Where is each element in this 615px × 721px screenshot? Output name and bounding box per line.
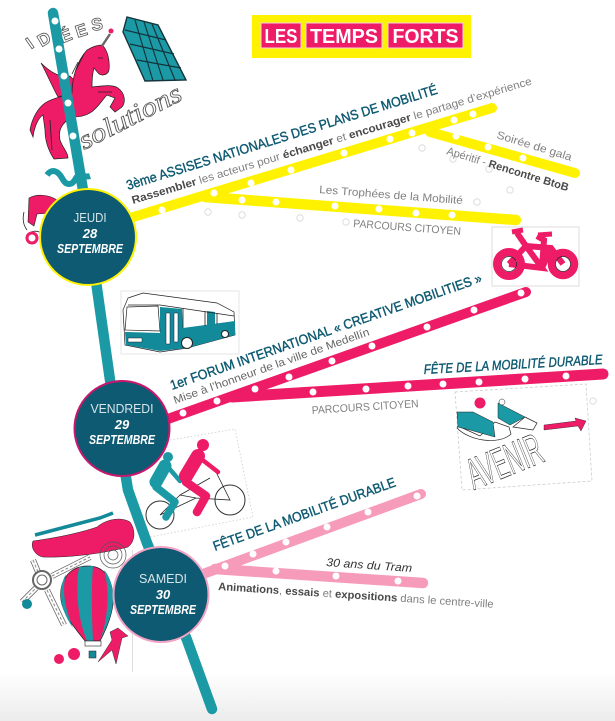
icon: words IDEES: E — [73, 20, 90, 42]
icon: pink scooter — [23, 195, 57, 243]
icon: hot air balloon — [61, 566, 113, 658]
icon: words IDEES: D — [34, 28, 54, 51]
icon: words IDEES: I — [22, 34, 37, 53]
text: rassembler: Rassembler les acteurs pour échanger et encourager le partage d’expérience — [130, 76, 533, 207]
icon: solar panel — [123, 17, 186, 81]
text: soiree de gala: Soirée de gala — [495, 129, 574, 164]
day badge: vendredi: 29 — [114, 417, 130, 432]
icon: pink bicycle — [492, 227, 579, 286]
icon: sneaker one — [457, 412, 511, 441]
icon: words IDEES: S — [90, 14, 104, 35]
day badge: jeudi: 28 — [82, 226, 98, 241]
text: animations: Animations, essais et expositions dans le centre-ville — [218, 581, 494, 611]
icon: paddle — [35, 513, 113, 535]
text: 30 ans du tram: 30 ans du Tram — [326, 557, 413, 575]
rider: pink — [186, 439, 218, 512]
icon: teal squiggle — [47, 171, 90, 184]
day badge: vendredi: SEPTEMBRE — [89, 432, 155, 447]
icon: sneakers, arrow and AVENIR — [455, 384, 592, 499]
icon: roundabout roads — [22, 557, 90, 625]
day badge: samedi: SEPTEMBRE — [130, 602, 196, 617]
day badge: samedi: SAMEDI — [139, 572, 187, 586]
icon: flowers — [54, 648, 80, 664]
icon: pink tower arrow — [98, 628, 128, 664]
icon: teal dot — [22, 599, 32, 609]
icon: flower — [474, 398, 486, 408]
text: parcours citoyen jeudi: PARCOURS CITOYEN — [353, 218, 461, 238]
icon: tandem bicycle — [146, 429, 253, 537]
text: trophees: Les Trophées de la Mobilité — [319, 184, 463, 207]
day badge: jeudi: JEUDI — [74, 211, 106, 225]
icon: kayak, roundabout and balloon — [22, 513, 134, 664]
title word: LES: LES — [264, 26, 298, 48]
heading: forum international: 1er FORUM INTERNATIONAL « CREATIVE MOBILITIES » — [168, 270, 484, 393]
heading: fete samedi: FÊTE DE LA MOBILITÉ DURABLE — [211, 475, 398, 554]
faint station markers — [205, 145, 596, 404]
yellow route: jeudi — [130, 108, 575, 220]
icon: swirl — [100, 542, 126, 568]
day badge: samedi — [114, 547, 208, 642]
icon: teal bus — [121, 291, 239, 354]
icon: kayak — [32, 519, 134, 557]
text: medellin: Mise à l’honneur de la ville de Medellín — [172, 326, 371, 407]
title word: TEMPS: TEMPS — [310, 26, 378, 48]
day badge: samedi: 30 — [156, 587, 171, 602]
icon: pink winged unicorn — [30, 28, 124, 159]
text art: solutions: solutions — [73, 78, 187, 155]
day badge: jeudi: SEPTEMBRE — [57, 241, 123, 256]
text: aperitif: Apéritif - Rencontre BtoB — [445, 145, 570, 194]
text: parcours citoyen vendredi: PARCOURS CITOYEN — [311, 398, 419, 417]
light pink route: samedi — [203, 492, 423, 584]
icon: pink arrow — [544, 418, 586, 431]
rider: teal — [156, 452, 180, 517]
day badge: jeudi — [40, 189, 136, 285]
icon: sneaker two — [498, 399, 537, 430]
day badge: vendredi: VENDREDI — [90, 402, 154, 416]
pink route: vendredi — [165, 290, 603, 420]
title banner — [252, 15, 471, 58]
icon: words IDEES — [22, 14, 104, 53]
heading: assises nationales: 3ème ASSISES NATIONALES DES PLANS DE MOBILITÉ — [124, 82, 439, 193]
timeline: teal line — [52, 13, 212, 709]
title word: FORTS: FORTS — [392, 26, 458, 48]
day badge: vendredi — [74, 381, 170, 476]
icon: words IDEES: É — [57, 25, 75, 47]
